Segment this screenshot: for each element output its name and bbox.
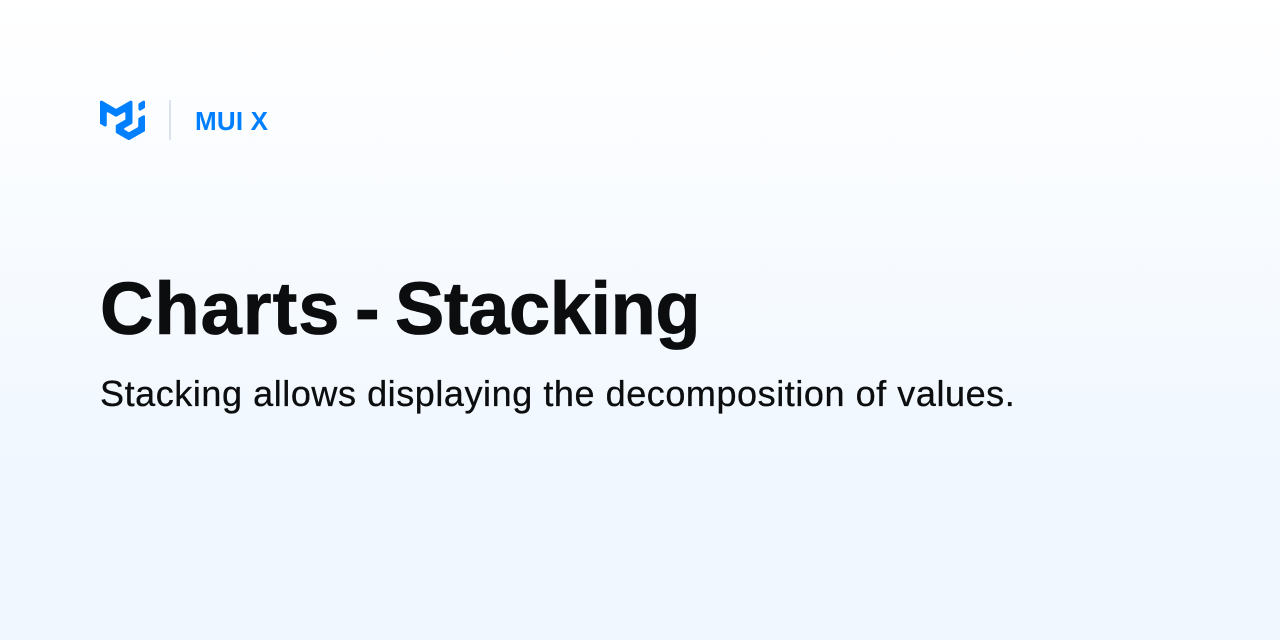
divider [169,100,171,140]
title: Charts [100,267,340,350]
title: Stacking [395,267,700,350]
product name: MUI X [195,106,268,136]
icon: MUI logo [100,100,145,140]
header: logo and product name [100,100,268,140]
subtitle: Stacking allows displaying the decomposition of values. [100,373,1015,414]
title: - [355,267,379,350]
title [100,267,700,350]
